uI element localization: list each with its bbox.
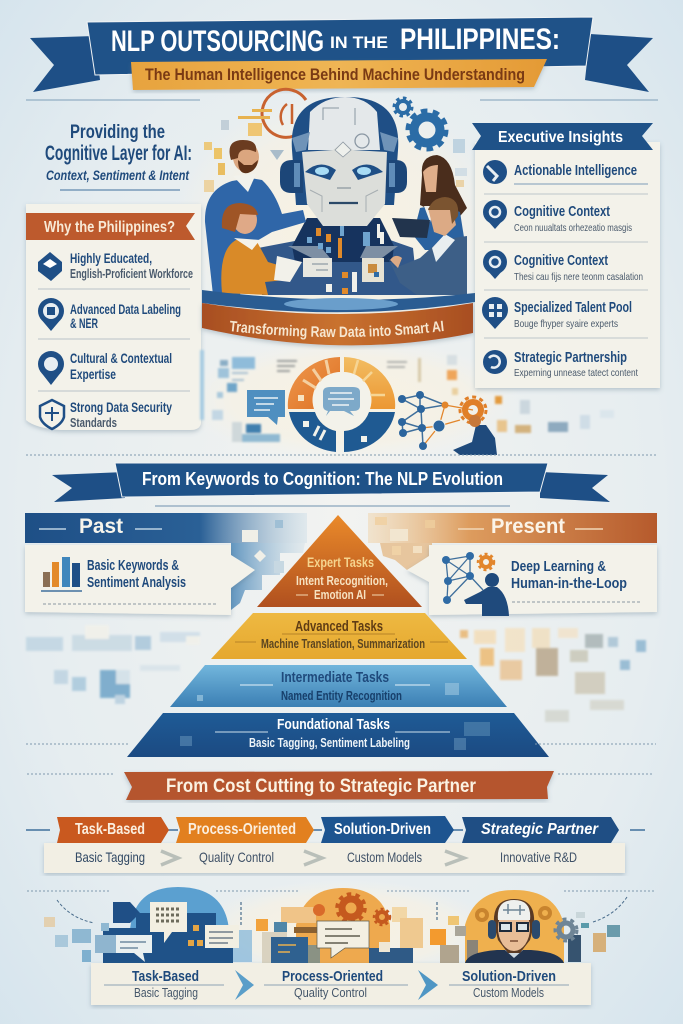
item: data labeling: & NER <box>70 315 98 331</box>
tier: advanced tasks <box>211 613 467 659</box>
tier: foundational tasks: Foundational Tasks <box>277 716 390 733</box>
step: strategic partner <box>462 817 619 843</box>
present header: Present <box>491 515 565 538</box>
bottom item: solution-driven <box>449 968 569 1000</box>
tier: advanced tasks: Advanced Tasks <box>295 618 383 635</box>
heading: cognitive layer: Providing the <box>70 122 165 143</box>
item: educated workforce: English-Proficient Workforce <box>70 266 193 281</box>
step: process-oriented: Process-Oriented <box>188 821 296 838</box>
panel: executive insights <box>472 123 660 388</box>
past header: Past <box>79 515 123 538</box>
banner: transforming raw data <box>200 290 475 350</box>
present callout <box>407 545 657 616</box>
item: data labeling <box>38 298 181 331</box>
illustration: process-oriented <box>256 888 423 963</box>
speech bubble icon <box>247 390 285 425</box>
bottom item: process-oriented <box>264 968 408 1000</box>
bottom item: task-based: Basic Tagging <box>134 985 198 1000</box>
step: task-based <box>57 817 169 843</box>
steps panel: Basic Tagging <box>75 849 145 865</box>
data fragments left <box>26 625 200 704</box>
illustration: task-based <box>44 887 437 963</box>
person: man left <box>205 140 306 295</box>
item: cultural expertise <box>38 350 172 385</box>
subtitle ribbon <box>131 59 547 90</box>
tier: expert tasks: Emotion AI <box>314 587 366 602</box>
steps panel <box>44 843 625 873</box>
illustration: gears and arc <box>204 89 467 192</box>
bottom item: task-based <box>104 968 224 1000</box>
bottom item: process-oriented: Quality Control <box>294 985 367 1000</box>
bottom panel <box>91 963 591 1005</box>
illustration: robot and team <box>205 97 467 295</box>
past callout: Basic Keywords & <box>87 558 179 574</box>
tier: intermediate tasks <box>170 665 507 707</box>
heading: cognitive layer: Context, Sentiment & Intent <box>46 167 190 183</box>
progression steps <box>26 816 645 873</box>
step: process-oriented <box>176 817 314 843</box>
tier: intermediate tasks: Intermediate Tasks <box>281 669 389 686</box>
past header <box>25 513 307 543</box>
person: man right <box>388 197 467 295</box>
past callout <box>25 545 255 615</box>
icon: network and person <box>442 552 509 616</box>
insight: specialized talent pool: Bouge fhyper syaire experts <box>514 318 618 330</box>
pyramid <box>127 515 549 757</box>
illustration: solution-driven expert <box>430 890 627 963</box>
insight: specialized talent pool: Specialized Talent Pool <box>514 300 632 316</box>
past callout: Sentiment Analysis <box>87 575 186 591</box>
tier: advanced tasks: Machine Translation, Summarization <box>261 636 425 651</box>
title text: IN THE <box>330 33 388 52</box>
insight: specialized talent pool <box>482 297 632 330</box>
console body <box>258 218 418 295</box>
insight: cognitive context one <box>483 200 632 234</box>
title text: NLP OUTSOURCING <box>111 25 324 58</box>
present callout: Deep Learning & <box>511 558 606 575</box>
insight: actionable intelligence: Actionable Intelligence <box>514 163 637 179</box>
insight: strategic partnership: Experning unnease tatect content <box>514 367 638 379</box>
section banner: strategic partner: From Cost Cutting to Strategic Partner <box>166 776 477 797</box>
title text: PHILIPPINES: <box>400 23 560 56</box>
bottom item: solution-driven: Custom Models <box>473 985 544 1000</box>
network and analyst <box>398 391 497 455</box>
banner: why the Philippines: Why the Philippines? <box>44 219 175 236</box>
step: solution-driven <box>321 816 454 843</box>
data fragments left of wheel <box>200 350 297 442</box>
arrow <box>418 970 438 1000</box>
insight: cognitive context one: Cognitive Context <box>514 204 610 220</box>
steps panel: Innovative R&D <box>500 849 577 865</box>
tier: foundational tasks: Basic Tagging, Sentiment Labeling <box>249 735 410 750</box>
person: woman front <box>221 203 302 295</box>
panel: why the Philippines <box>26 204 201 430</box>
insight: strategic partnership <box>483 350 638 379</box>
banner: executive insights: Executive Insights <box>498 129 623 146</box>
past backdrop <box>231 543 305 610</box>
item: data security: Strong Data Security <box>70 399 172 415</box>
banner: executive insights <box>472 123 653 150</box>
bottom item: process-oriented: Process-Oriented <box>282 968 383 985</box>
item: educated workforce <box>38 250 193 281</box>
title banner <box>30 17 653 92</box>
item: educated workforce: Highly Educated, <box>70 250 152 266</box>
item: cultural expertise: Cultural & Contextual <box>70 350 172 366</box>
tier: intermediate tasks: Named Entity Recognition <box>281 688 402 703</box>
item: data security <box>40 399 172 430</box>
banner: transforming raw data: Transforming Raw Data into Smart AI <box>230 320 444 340</box>
tier: expert tasks: Expert Tasks <box>307 554 374 570</box>
banner: why the Philippines <box>26 213 195 240</box>
insight: cognitive context two <box>483 250 643 283</box>
present header <box>368 513 657 543</box>
heading: cognitive layer: Cognitive Layer for AI: <box>45 142 192 165</box>
person: woman right <box>413 155 467 250</box>
step: strategic partner: Strategic Partner <box>481 821 599 838</box>
insight: actionable intelligence <box>483 160 637 184</box>
item: data labeling: Advanced Data Labeling <box>70 301 181 317</box>
heading: cognitive layer <box>45 122 192 183</box>
insight: cognitive context one: Ceon nuualtats orhezeatio masgis <box>514 222 632 234</box>
subtitle ribbon: The Human Intelligence Behind Machine Understanding <box>145 65 525 84</box>
robot head <box>280 97 407 226</box>
section banner: NLP evolution <box>52 463 610 502</box>
data fragments right of wheel <box>387 355 614 433</box>
tablet <box>392 218 430 238</box>
insight: cognitive context two: Cognitive Context <box>514 253 608 269</box>
icon: bar chart <box>41 557 82 591</box>
steps panel: Quality Control <box>199 849 274 865</box>
tier: foundational tasks <box>127 713 549 757</box>
present callout: Human-in-the-Loop <box>511 575 627 592</box>
section banner: NLP evolution: From Keywords to Cognition: The NLP Evolution <box>142 468 503 489</box>
title text <box>111 23 560 58</box>
insight: strategic partnership: Strategic Partnership <box>514 350 627 366</box>
tier: expert tasks: Intent Recognition, <box>296 573 388 588</box>
section banner: strategic partner <box>124 771 554 800</box>
item: cultural expertise: Expertise <box>70 366 116 382</box>
tier: expert tasks <box>257 515 422 607</box>
item: data security: Standards <box>70 415 117 430</box>
insight: cognitive context two: Thesi cau fijs nere teonm casalation <box>514 271 643 283</box>
data wheel <box>288 357 395 452</box>
steps panel: Custom Models <box>347 849 422 865</box>
bottom item: task-based: Task-Based <box>132 968 199 985</box>
present backdrop <box>380 543 432 570</box>
arrow <box>235 970 254 1000</box>
bottom item: solution-driven: Solution-Driven <box>462 968 556 985</box>
step: task-based: Task-Based <box>75 821 145 838</box>
step: solution-driven: Solution-Driven <box>334 821 431 838</box>
data fragments right <box>460 628 646 722</box>
